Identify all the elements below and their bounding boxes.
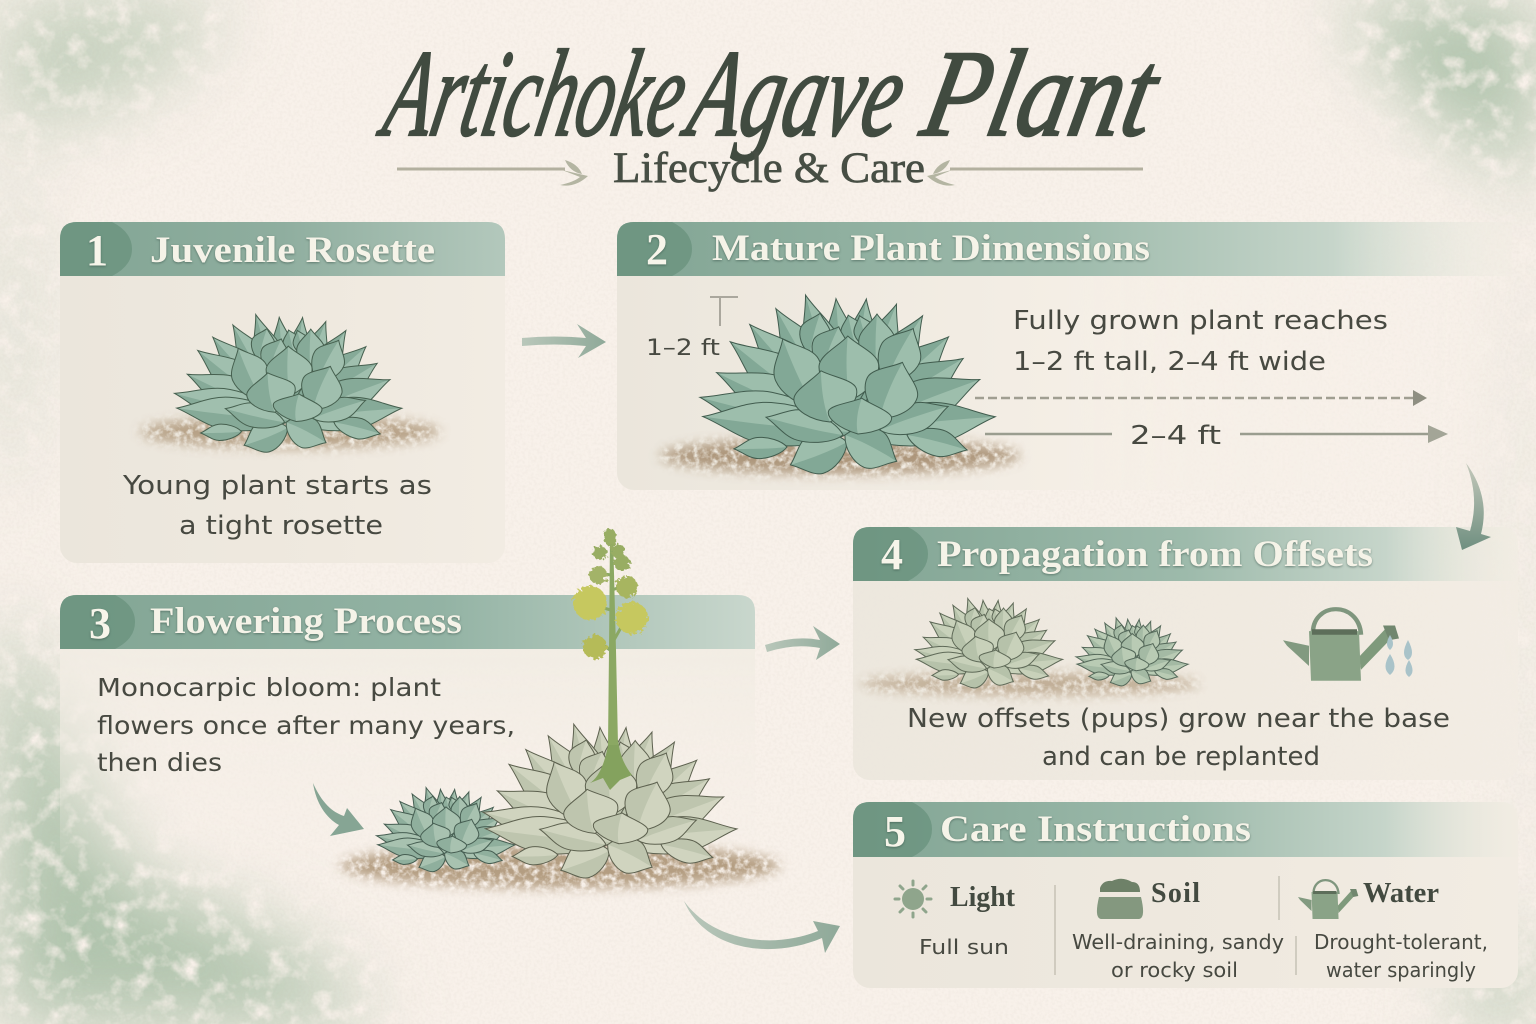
flowering description: then dies — [97, 748, 222, 777]
panel: mature plant dimensions — [617, 222, 1512, 490]
width marker — [985, 421, 1448, 451]
header 3: Flowering Process — [150, 601, 462, 642]
header 2: 2 — [646, 225, 668, 274]
arrow: step 3 to 5 — [684, 901, 840, 953]
title: Plant — [911, 25, 1172, 163]
column: soil: Well-draining, sandy — [1072, 930, 1284, 954]
column: light: Full sun — [919, 935, 1009, 959]
column: soil: Soil — [1151, 878, 1200, 909]
column: light: Light — [950, 882, 1016, 913]
header 1: Juvenile Rosette — [150, 230, 435, 271]
header 5: 5 — [884, 807, 906, 856]
offsets description — [907, 704, 1450, 772]
soil mound 1 — [140, 416, 440, 448]
width marker: 2–4 ft — [1130, 421, 1221, 451]
panel: care instructions — [853, 802, 1518, 988]
soil mound 2 — [660, 438, 1020, 474]
icon: sun — [895, 881, 931, 917]
column: light — [895, 881, 1016, 959]
icon: watering can — [1283, 609, 1399, 681]
soil mound 3 — [340, 844, 780, 888]
juvenile description — [122, 471, 432, 541]
header 3: 3 — [89, 599, 111, 648]
arrow: step 3 to 4 — [765, 626, 840, 660]
icon: dying mother plant — [479, 719, 739, 886]
title — [370, 25, 1172, 163]
subtitle with leaf rules — [397, 145, 1143, 192]
juvenile description: Young plant starts as — [122, 471, 432, 501]
mature description — [1013, 306, 1388, 377]
header 4: Propagation from Offsets — [937, 534, 1373, 575]
title: Agave — [673, 25, 917, 163]
panel: flowering process — [60, 528, 780, 888]
mature description: Fully grown plant reaches — [1013, 306, 1388, 336]
icon: water drops — [1386, 635, 1412, 677]
arrow: step 1 to 2 — [522, 324, 606, 358]
header 3 — [60, 595, 755, 649]
icon: mature rosette plant — [695, 289, 997, 484]
header 2 — [617, 222, 1512, 276]
icon: small offset plant — [374, 785, 516, 876]
flowering description: Monocarpic bloom: plant — [97, 673, 441, 702]
flowering description — [97, 673, 515, 777]
column: water: Drought-tolerant, — [1314, 930, 1488, 954]
column: soil — [1072, 878, 1284, 982]
header 5 — [853, 802, 1518, 857]
icon: juvenile rosette plant — [171, 310, 404, 460]
flower stalk — [573, 528, 648, 790]
icon: small offset — [1074, 615, 1189, 690]
arrow: step 2 to 4 — [1456, 463, 1491, 550]
column: water: water sparingly — [1326, 958, 1476, 982]
panel: propagation from offsets — [853, 527, 1518, 780]
icon: small watering can — [1298, 880, 1358, 919]
flower clusters — [573, 528, 648, 659]
column: water: Water — [1363, 878, 1439, 909]
height marker: 1–2 ft — [646, 336, 720, 361]
mature description: 1–2 ft tall, 2–4 ft wide — [1013, 347, 1326, 377]
offsets description: and can be replanted — [1042, 742, 1320, 772]
header 5: Care Instructions — [940, 809, 1251, 850]
header 1: 1 — [86, 226, 108, 275]
subtitle with leaf rules: Lifecycle & Care — [613, 145, 925, 192]
title: Artichoke — [370, 25, 699, 163]
offsets description: New offsets (pups) grow near the base — [907, 704, 1450, 734]
icon: soil bag — [1097, 879, 1143, 919]
icon: large offset — [913, 595, 1064, 693]
width marker dashed — [975, 390, 1427, 406]
header 2: Mature Plant Dimensions — [712, 228, 1150, 269]
header 1 — [60, 222, 505, 276]
panel: juvenile rosette — [60, 222, 505, 563]
column: soil: or rocky soil — [1111, 958, 1238, 982]
height marker — [646, 297, 738, 361]
soil mound 4 — [860, 673, 1200, 695]
header 4: 4 — [881, 530, 903, 579]
arrow: to small offset — [313, 783, 364, 836]
flowering description: flowers once after many years, — [97, 711, 515, 740]
header 4 — [853, 527, 1518, 581]
column: water — [1298, 878, 1488, 982]
juvenile description: a tight rosette — [179, 511, 383, 541]
